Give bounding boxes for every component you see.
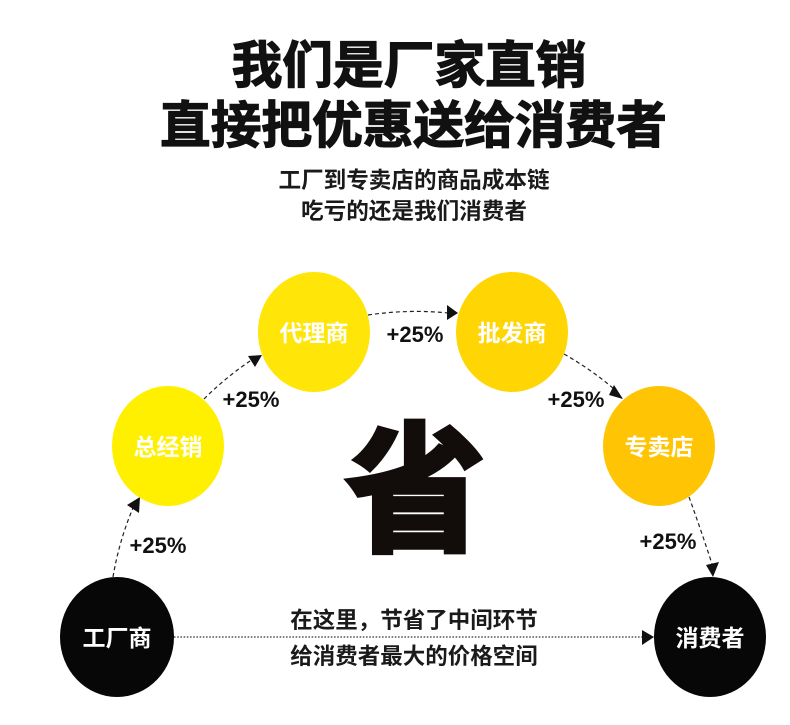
label: +25% upper right: +25% [548,387,604,412]
node: wholesaler [456,272,568,392]
node: factory: 工厂商 [82,625,152,651]
node: retailer [603,386,715,506]
arrow: wholesaler to retailer [564,354,623,399]
title: 我们是厂家直销 [232,37,586,94]
arrow: factory to distributor [113,497,140,577]
arrow: distributor to agent [204,355,262,399]
caption [290,608,538,669]
node: wholesaler: 批发商 [478,320,546,346]
node: consumer [654,577,766,697]
title: 直接把优惠送给消费者 [160,97,667,154]
node: agent: 代理商 [280,320,348,346]
node: retailer: 专卖店 [624,434,694,460]
subtitle [278,168,550,224]
node: general distributor: 总经销 [134,434,202,460]
node: consumer: 消费者 [676,625,744,651]
central character: 省 [345,413,486,570]
label: +25% right: +25% [640,529,696,554]
node: general distributor [112,386,224,506]
node: factory [60,577,174,697]
caption: 在这里，节省了中间环节 [290,608,538,633]
subtitle: 吃亏的还是我们消费者 [301,199,527,224]
label: +25% left: +25% [130,533,186,558]
title [160,37,667,154]
node: agent [258,272,370,392]
caption: 给消费者最大的价格空间 [290,644,538,669]
arrow: factory to consumer [174,630,654,645]
subtitle: 工厂到专卖店的商品成本链 [278,168,550,193]
label: +25% top: +25% [387,322,443,347]
arrow: agent to wholesaler [368,305,458,320]
label: +25% upper left: +25% [223,387,279,412]
arrow: retailer to consumer [689,497,719,577]
